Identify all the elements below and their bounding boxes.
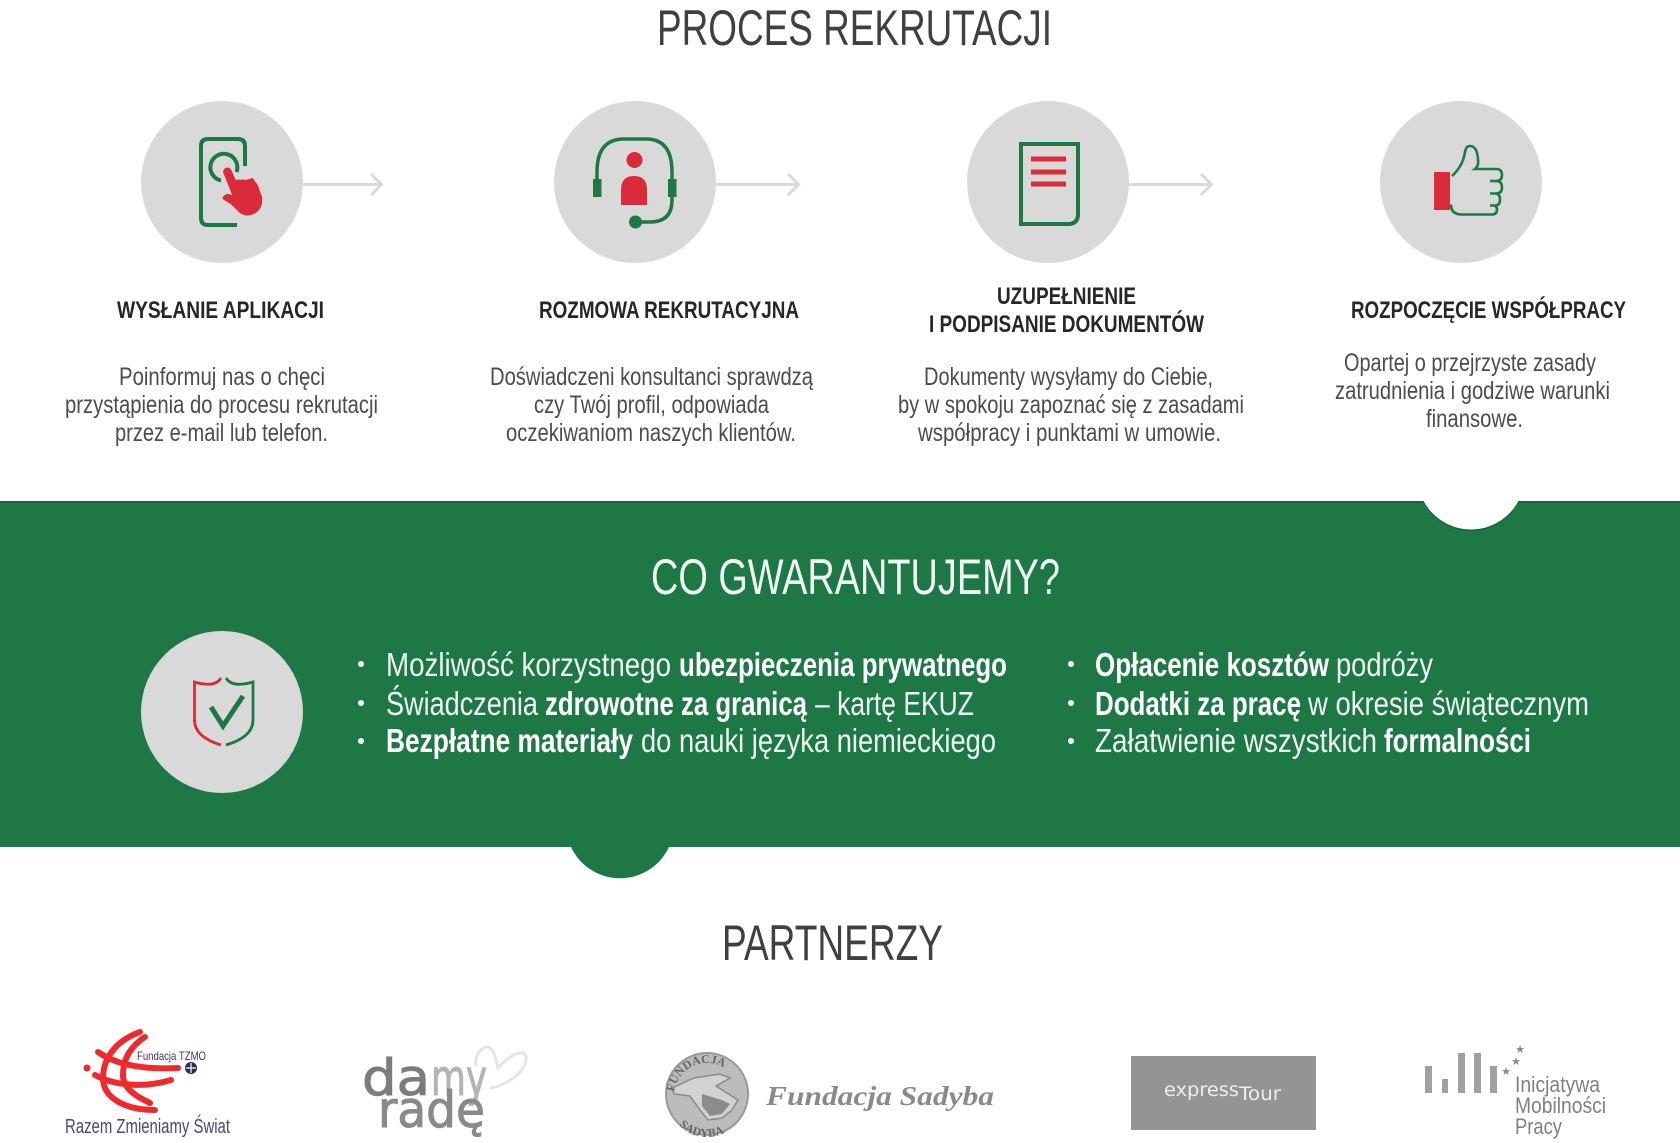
- step 4: rozpoczęcie współpracy: [1335, 101, 1626, 433]
- icon: thumbs up: [1380, 101, 1542, 263]
- list: right column: [1068, 646, 1589, 759]
- text 2: Doświadczeni konsultanci sprawdzą: [490, 363, 813, 391]
- list: left column: – kartę EKUZ: [815, 685, 974, 722]
- list: right column: Opłacenie kosztów: [1095, 646, 1329, 683]
- arrow 2: [716, 174, 798, 195]
- list: right column: formalności: [1384, 722, 1531, 759]
- white notch: [1423, 500, 1519, 531]
- text 2: [490, 363, 813, 447]
- text 1: przez e-mail lub telefon.: [115, 419, 328, 447]
- icon: document: [967, 101, 1129, 263]
- text 1: przystąpienia do procesu rekrutacji: [65, 391, 378, 419]
- title: proces rekrutacji: PROCES REKRUTACJI: [657, 0, 1052, 56]
- text 4: [1335, 349, 1610, 433]
- logo: damy radę: radę: [378, 1081, 485, 1139]
- text 3: Dokumenty wysyłamy do Ciebie,: [924, 363, 1213, 391]
- heading 1: WYSŁANIE APLIKACJI: [117, 297, 324, 324]
- list: left column: Bezpłatne materiały: [386, 722, 634, 759]
- logo: fundacja tzmo: Razem Zmieniamy Świat: [65, 1114, 230, 1138]
- logo: inicjatywa mobilności pracy: ★: [1515, 1043, 1525, 1056]
- text 4: zatrudnienia i godziwe warunki: [1335, 377, 1610, 405]
- logo: inicjatywa mobilności pracy: [1425, 1043, 1606, 1139]
- heading 3: UZUPEŁNIENIE: [997, 283, 1136, 310]
- logo: fundacja sadyba: [665, 1052, 994, 1138]
- icon: phone with tapping hand: [141, 101, 303, 263]
- list: left column: [358, 646, 1007, 759]
- text 1: [65, 363, 378, 447]
- text 3: by w spokoju zapoznać się z zasadami: [898, 391, 1244, 419]
- heading: co gwarantujemy: CO GWARANTUJEMY?: [651, 549, 1060, 605]
- icon: headset with person: [554, 101, 716, 263]
- arrow 1: [303, 174, 382, 195]
- green bump: [571, 847, 669, 878]
- panel: co gwarantujemy: [0, 500, 1680, 878]
- list: right column: Dodatki za pracę: [1095, 685, 1301, 722]
- arrow 3: [1129, 174, 1212, 195]
- list: right column: Załatwienie wszystkich: [1095, 722, 1377, 759]
- logo: fundacja tzmo: Fundacja TZMO: [137, 1049, 206, 1063]
- logo: damy radę: my: [431, 1049, 487, 1107]
- logo: inicjatywa mobilności pracy: ★: [1501, 1065, 1511, 1078]
- logo: inicjatywa mobilności pracy: Mobilności: [1515, 1093, 1606, 1118]
- list: left column: Świadczenia: [386, 684, 539, 722]
- text 4: Opartej o przejrzyste zasady: [1344, 349, 1596, 377]
- heading: partnerzy: PARTNERZY: [722, 915, 943, 971]
- logo: express tour: Tour: [1238, 1083, 1281, 1105]
- logo: damy radę: da: [362, 1049, 430, 1107]
- icon: shield with check: [141, 631, 303, 793]
- logo: inicjatywa mobilności pracy: ★: [1511, 1055, 1521, 1068]
- list: left column: do nauki języka niemieckiego: [641, 722, 996, 759]
- logo: fundacja sadyba: SADYBA: [680, 1120, 724, 1138]
- list: left column: zdrowotne za granicą: [545, 685, 808, 722]
- step 1: wysłanie aplikacji: [65, 101, 382, 447]
- logo: express tour: [1131, 1056, 1316, 1130]
- list: left column: Możliwość korzystnego: [386, 646, 671, 683]
- heading 3: I PODPISANIE DOKUMENTÓW: [929, 310, 1204, 338]
- logo: inicjatywa mobilności pracy: Inicjatywa: [1515, 1072, 1601, 1097]
- text 2: oczekiwaniom naszych klientów.: [506, 419, 796, 447]
- logo: inicjatywa mobilności pracy: Pracy: [1515, 1114, 1562, 1139]
- heading 2: ROZMOWA REKRUTACYJNA: [539, 297, 799, 324]
- text 3: [898, 363, 1244, 447]
- logo: fundacja tzmo: [65, 1032, 230, 1138]
- logo: damy radę: [362, 1047, 526, 1139]
- logo: fundacja sadyba: FUNDACJA: [666, 1055, 724, 1092]
- text 4: finansowe.: [1426, 405, 1523, 433]
- text 2: czy Twój profil, odpowiada: [534, 391, 769, 419]
- logo: express tour: express: [1164, 1079, 1239, 1101]
- step 3: uzupełnienie i podpisanie dokumentów: [898, 101, 1244, 447]
- logo: fundacja sadyba: Fundacja Sadyba: [765, 1081, 994, 1111]
- list: left column: ubezpieczenia prywatnego: [679, 646, 1007, 683]
- text 3: współpracy i punktami w umowie.: [917, 419, 1221, 447]
- list: right column: w okresie świątecznym: [1307, 685, 1589, 722]
- list: right column: podróży: [1336, 646, 1433, 683]
- text 1: Poinformuj nas o chęci: [119, 363, 325, 391]
- heading 3: [929, 283, 1204, 338]
- step 2: rozmowa rekrutacyjna: [490, 101, 813, 447]
